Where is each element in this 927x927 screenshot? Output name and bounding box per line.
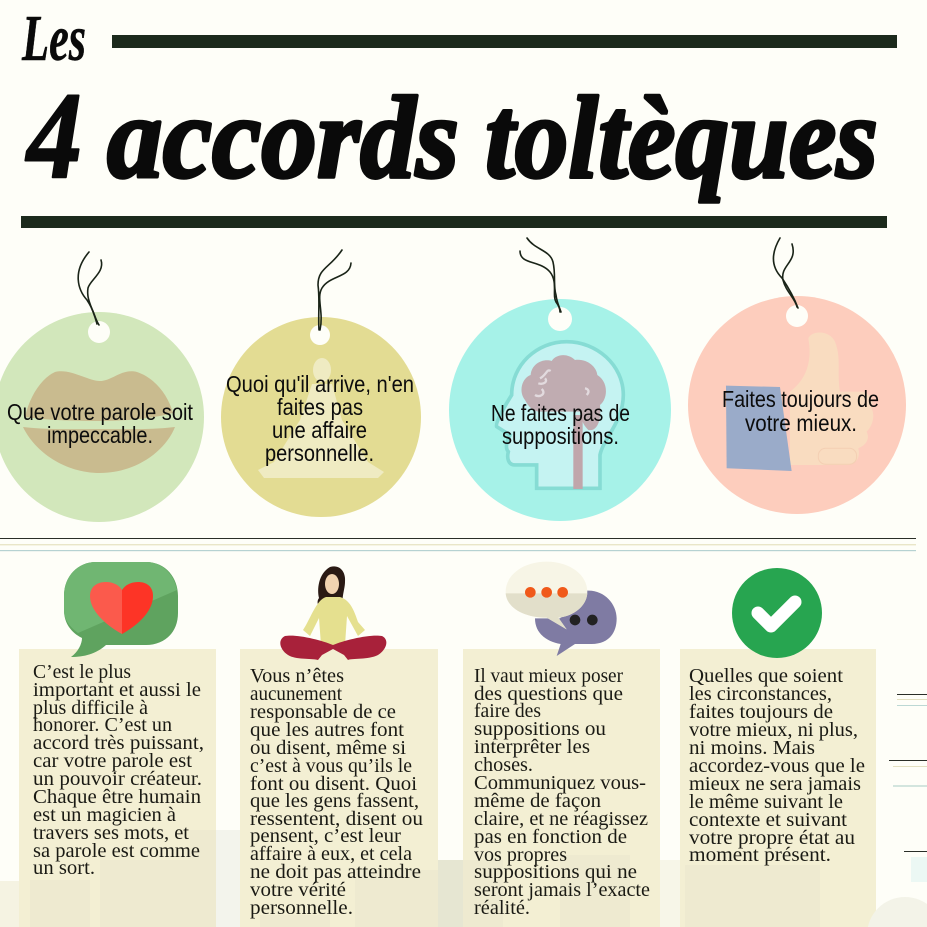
title: 4 accords toltèques: toltèques <box>485 72 878 203</box>
body text 1: accord très puissant, <box>33 733 204 754</box>
body text 3: suppositions qui ne <box>474 862 637 883</box>
body text 3: Communiquez vous- <box>474 773 646 794</box>
icon: meditating woman <box>280 566 386 660</box>
body text 2: personnelle. <box>250 898 353 919</box>
body text 2: que les gens fassent, <box>250 791 419 812</box>
right edge remnants <box>867 694 927 927</box>
body text 2: Vous n’êtes <box>250 666 344 687</box>
label: Que votre parole soit impeccable: impeccable. <box>47 422 153 448</box>
label: Que votre parole soit impeccable <box>7 399 194 448</box>
body text 3: suppositions ou <box>474 719 606 740</box>
body text 3: interprêter les <box>474 737 590 758</box>
body text 3: claire, et ne réagissez <box>474 809 648 830</box>
body text 4: votre propre état au <box>689 828 855 849</box>
body text 2: ou disent, même si <box>250 738 407 759</box>
city tint <box>260 870 438 927</box>
body text 3: vos propres <box>474 845 567 866</box>
icon: green check mark <box>732 568 822 658</box>
icon: head with brain <box>496 342 623 489</box>
body text 1: C’est le plus <box>33 662 131 683</box>
body text 1: Chaque être humain <box>33 787 201 808</box>
city tint <box>463 855 630 927</box>
bottom title rule <box>21 216 887 228</box>
body text 1: un sort. <box>33 858 95 879</box>
body text 4: votre mieux, ni plus, <box>689 720 858 741</box>
body text 1: travers ses mots, et <box>33 823 190 844</box>
label: Faites toujours de votre mieux: Faites toujours de <box>722 386 879 412</box>
body text 4: accordez-vous que le <box>689 756 865 777</box>
body text 3: choses. <box>474 755 533 776</box>
label: Ne faites pas de suppositions: Ne faites pas de <box>491 400 630 426</box>
label: Ne faites pas de suppositions <box>491 400 630 449</box>
body text 4: ni moins. Mais <box>689 738 815 759</box>
body text 1: un pouvoir créateur. <box>33 769 202 790</box>
icon: two speech bubbles <box>506 562 617 656</box>
title: Les: Les <box>21 2 86 75</box>
panel: accord 3 <box>463 649 660 927</box>
tag: parole impeccable <box>0 252 204 522</box>
body text 3: réalité. <box>474 898 530 919</box>
label: Quoi qu'il arrive <box>226 371 414 466</box>
panel: accord 1 <box>19 649 216 927</box>
city tint <box>685 865 820 927</box>
body text 4: moment présent. <box>689 845 831 866</box>
body text 2: c’est à vous qu’ils le <box>250 756 412 777</box>
body text 1 <box>33 662 204 879</box>
body text 3: pas en fonction de <box>474 827 627 848</box>
body text 1: est un magicien à <box>33 805 176 826</box>
label: Quoi qu'il arrive: Quoi qu'il arrive, n'en <box>226 371 414 397</box>
body text 2 <box>250 666 423 919</box>
icon: speech bubble with heart <box>64 562 178 657</box>
top title rule <box>112 35 897 48</box>
body text 4 <box>689 666 865 866</box>
body text 2: ressentent, disent ou <box>250 809 423 830</box>
body text 3: Il vaut mieux poser <box>474 666 623 687</box>
title: 4 accords toltèques: accords <box>107 72 459 203</box>
body text 3: des questions que <box>474 684 623 705</box>
icon: meditation silhouette <box>258 358 384 478</box>
icon: thumbs up <box>726 332 873 471</box>
body text 2: responsable de ce <box>250 702 396 723</box>
body text 4: Quelles que soient <box>689 666 844 687</box>
body text 4: les circonstances, <box>689 684 832 705</box>
body text 2: votre vérité <box>250 880 346 901</box>
body text 1: car votre parole est <box>33 751 193 772</box>
body text 1: plus difficile à <box>33 698 148 719</box>
body text 2: que les autres font <box>250 720 405 741</box>
body text 3: seront jamais l’exacte <box>474 880 650 901</box>
city tint <box>30 830 216 927</box>
label: Quoi qu'il arrive: faites pas <box>277 394 363 420</box>
title: 4 accords toltèques <box>25 67 878 204</box>
label: Quoi qu'il arrive: une affaire <box>272 417 367 443</box>
body text 1: honorer. C’est un <box>33 715 172 736</box>
body text 2: ne doit pas atteindre <box>250 862 421 883</box>
tag: suppositions <box>449 238 671 521</box>
body text 4: faites toujours de <box>689 702 833 723</box>
section divider <box>0 538 916 551</box>
label: Ne faites pas de suppositions: suppositions. <box>502 423 619 449</box>
label: Quoi qu'il arrive: personnelle. <box>265 440 374 466</box>
body text 4: le même suivant le <box>689 792 843 813</box>
title: 4 accords toltèques: 4 <box>25 67 82 204</box>
panel: accord 4 <box>680 649 876 927</box>
panel: accord 2 <box>240 649 438 927</box>
body text 2: affaire à eux, et cela <box>250 844 412 865</box>
tag: affaire personnelle <box>221 250 421 517</box>
body text 4: contexte et suivant <box>689 810 848 831</box>
label: Faites toujours de votre mieux: votre mieux. <box>745 410 857 436</box>
body text 3: faire des <box>474 701 541 722</box>
body text 3 <box>474 666 650 919</box>
tag: faites de votre mieux <box>688 238 906 514</box>
body text 2: aucunement <box>250 684 343 705</box>
body text 1: important et aussi le <box>33 680 201 701</box>
body text 1: sa parole est comme <box>33 841 200 862</box>
label: Que votre parole soit impeccable: Que votre parole soit <box>7 399 194 425</box>
body text 3: même de façon <box>474 791 601 812</box>
body text 4: mieux ne sera jamais <box>689 774 861 795</box>
body text 2: font ou disent. Quoi <box>250 774 418 795</box>
icon: lips <box>23 371 175 473</box>
body text 2: pensent, c’est leur <box>250 826 402 847</box>
background: faint city outside panels <box>0 830 680 927</box>
label: Faites toujours de votre mieux <box>722 386 879 436</box>
